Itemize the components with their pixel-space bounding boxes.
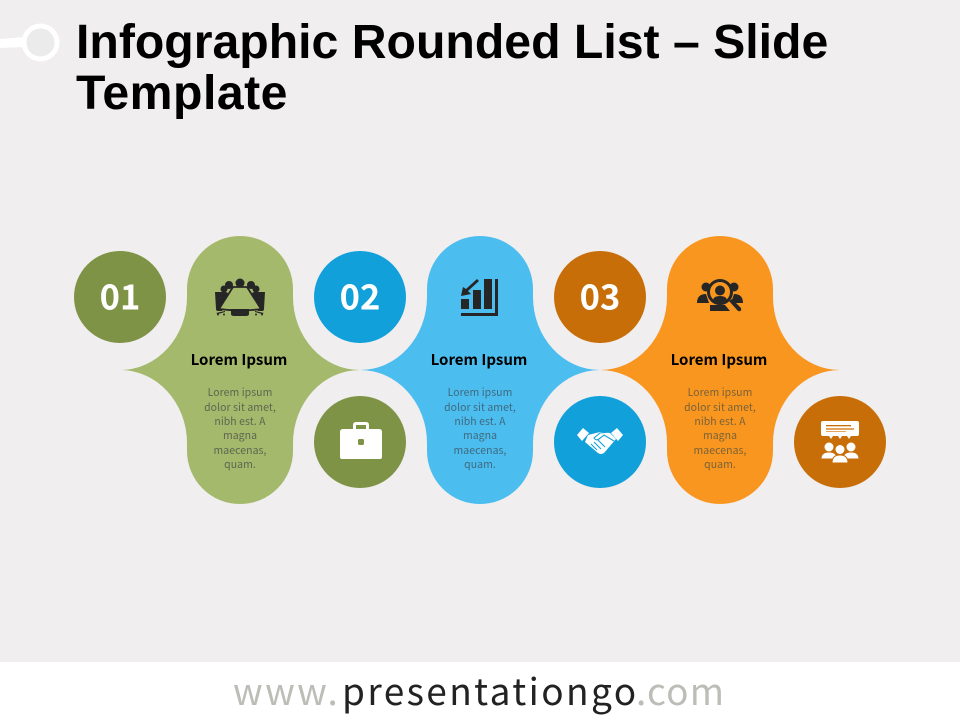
number badge 02: 02 — [340, 270, 380, 320]
body text: dolor sit amet, — [444, 400, 516, 415]
icon badge: briefcase — [314, 396, 406, 488]
footer website: presentationgo — [342, 662, 639, 716]
icon: people search — [697, 280, 743, 311]
body text: maecenas, — [454, 443, 507, 458]
body text: maecenas, — [694, 443, 747, 458]
body text: maecenas, — [214, 443, 267, 458]
rounded shape: green — [120, 236, 360, 504]
body text: nibh est. A — [694, 414, 746, 429]
number badge 01 — [74, 251, 166, 343]
number badge 03 — [554, 251, 646, 343]
panel: item 01 — [74, 236, 406, 504]
heading: Lorem Ipsum — [671, 349, 767, 370]
panel: item 02 — [314, 236, 646, 504]
rounded shape: blue — [360, 236, 600, 504]
body text: quam. — [464, 457, 496, 472]
number badge 02 — [314, 251, 406, 343]
body text: magna — [223, 428, 257, 443]
body text: quam. — [704, 457, 736, 472]
title: Template — [76, 66, 288, 120]
number badge 01: 01 — [100, 270, 140, 320]
body text: Lorem ipsum — [448, 385, 512, 400]
icon: conference table — [215, 278, 265, 316]
body text: magna — [463, 428, 497, 443]
body text: dolor sit amet, — [684, 400, 756, 415]
number badge 03: 03 — [580, 270, 620, 320]
body text: nibh est. A — [454, 414, 506, 429]
title: Infographic Rounded List – Slide — [76, 15, 828, 69]
body text: magna — [703, 428, 737, 443]
icon badge: handshake — [554, 396, 646, 488]
body text: dolor sit amet, — [204, 400, 276, 415]
rounded shape: orange — [600, 236, 840, 504]
heading: Lorem Ipsum — [191, 349, 287, 370]
body text: Lorem ipsum — [688, 385, 752, 400]
panel: item 03 — [554, 236, 886, 504]
body text: quam. — [224, 457, 256, 472]
heading: Lorem Ipsum — [431, 349, 527, 370]
icon: bar chart with arrow — [461, 279, 498, 316]
body text: Lorem ipsum — [208, 385, 272, 400]
footer website: www. — [233, 662, 340, 716]
icon: pin ring — [0, 26, 57, 59]
body text: nibh est. A — [214, 414, 266, 429]
icon badge: discussion group — [794, 396, 886, 488]
footer website: .com — [636, 662, 725, 716]
